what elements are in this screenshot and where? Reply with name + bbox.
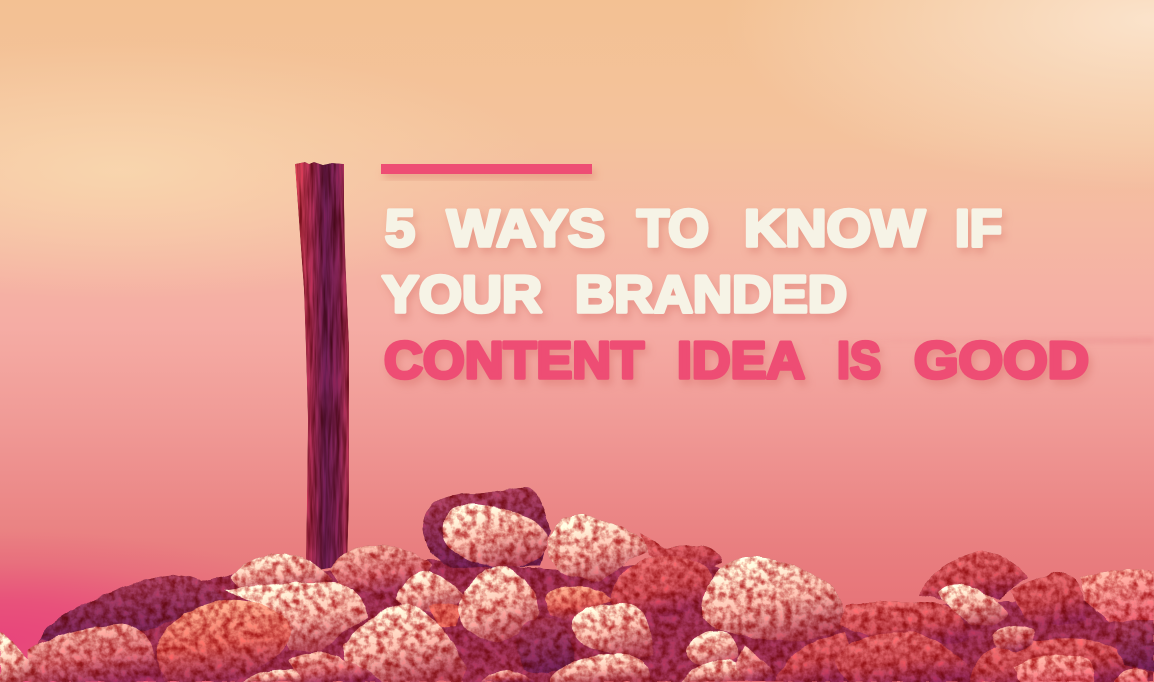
rock: red orange round	[157, 600, 292, 682]
rock: left dark	[40, 575, 225, 640]
rock: dark back boulder	[423, 487, 550, 568]
rock: light boulder	[443, 504, 547, 567]
accent bar	[381, 164, 592, 174]
title line 1: 5	[385, 200, 415, 258]
rock: bottom right small	[1114, 669, 1148, 682]
rock: small round pale	[686, 631, 739, 666]
title line 3: IS	[837, 332, 881, 390]
rock: big white boulder	[702, 557, 844, 640]
rock: bottom left	[28, 624, 165, 682]
title line 3: CONTENT	[384, 332, 644, 390]
rock: large centre front	[343, 603, 466, 682]
rock: top speckled	[232, 554, 332, 590]
rock: pale upright	[548, 515, 656, 582]
rock: small pale right	[992, 626, 1034, 652]
rock: under white boulder	[775, 632, 860, 682]
title line 1: IF	[955, 200, 1002, 258]
rock: pale right	[938, 584, 1008, 626]
title line 1: WAYS	[447, 200, 605, 258]
title line 3	[384, 332, 1089, 390]
title line 2	[382, 266, 847, 324]
rock: red right	[1010, 572, 1085, 625]
dark ground under the rocks	[20, 560, 1154, 682]
rock: centre back	[330, 545, 432, 595]
rock: orange small	[428, 603, 460, 628]
rock: bottom small	[480, 671, 535, 682]
rock: triangular	[735, 645, 778, 682]
rock: dark red cube	[517, 618, 575, 674]
rock: centre boulder	[458, 566, 539, 642]
rock: small orange	[545, 587, 612, 622]
rock: dark red round	[611, 556, 712, 616]
rock: bottom front pale	[680, 660, 752, 682]
rock: flat red slab	[840, 601, 968, 645]
title line 3: IDEA	[677, 332, 805, 390]
title line 1	[385, 200, 1002, 258]
rock: pink right	[1080, 570, 1154, 622]
rock: lower edge pale	[243, 670, 306, 682]
rock: bottom red mass	[835, 632, 982, 682]
title line 2: YOUR	[382, 266, 542, 324]
title line 3: GOOD	[914, 332, 1089, 390]
rock: corner pale	[0, 632, 46, 682]
rock: lower right rubble	[970, 638, 1130, 682]
rock: pale square	[572, 604, 653, 657]
rock: speckled wide	[225, 582, 368, 652]
title line 2: BRANDED	[575, 266, 847, 324]
rock: lower pair	[288, 652, 382, 682]
wooden post	[295, 162, 349, 570]
rock: bottom pale wide	[550, 654, 650, 682]
title line 1: TO	[637, 200, 709, 258]
rock: lower right	[1014, 655, 1095, 682]
rock: centre upper small	[396, 571, 465, 612]
rock: sharp shard	[640, 532, 722, 580]
rock: far right dark	[1114, 620, 1154, 672]
title line 1: KNOW	[744, 200, 926, 258]
rock pile	[0, 487, 1154, 682]
rock: right red boulder	[919, 551, 1028, 600]
